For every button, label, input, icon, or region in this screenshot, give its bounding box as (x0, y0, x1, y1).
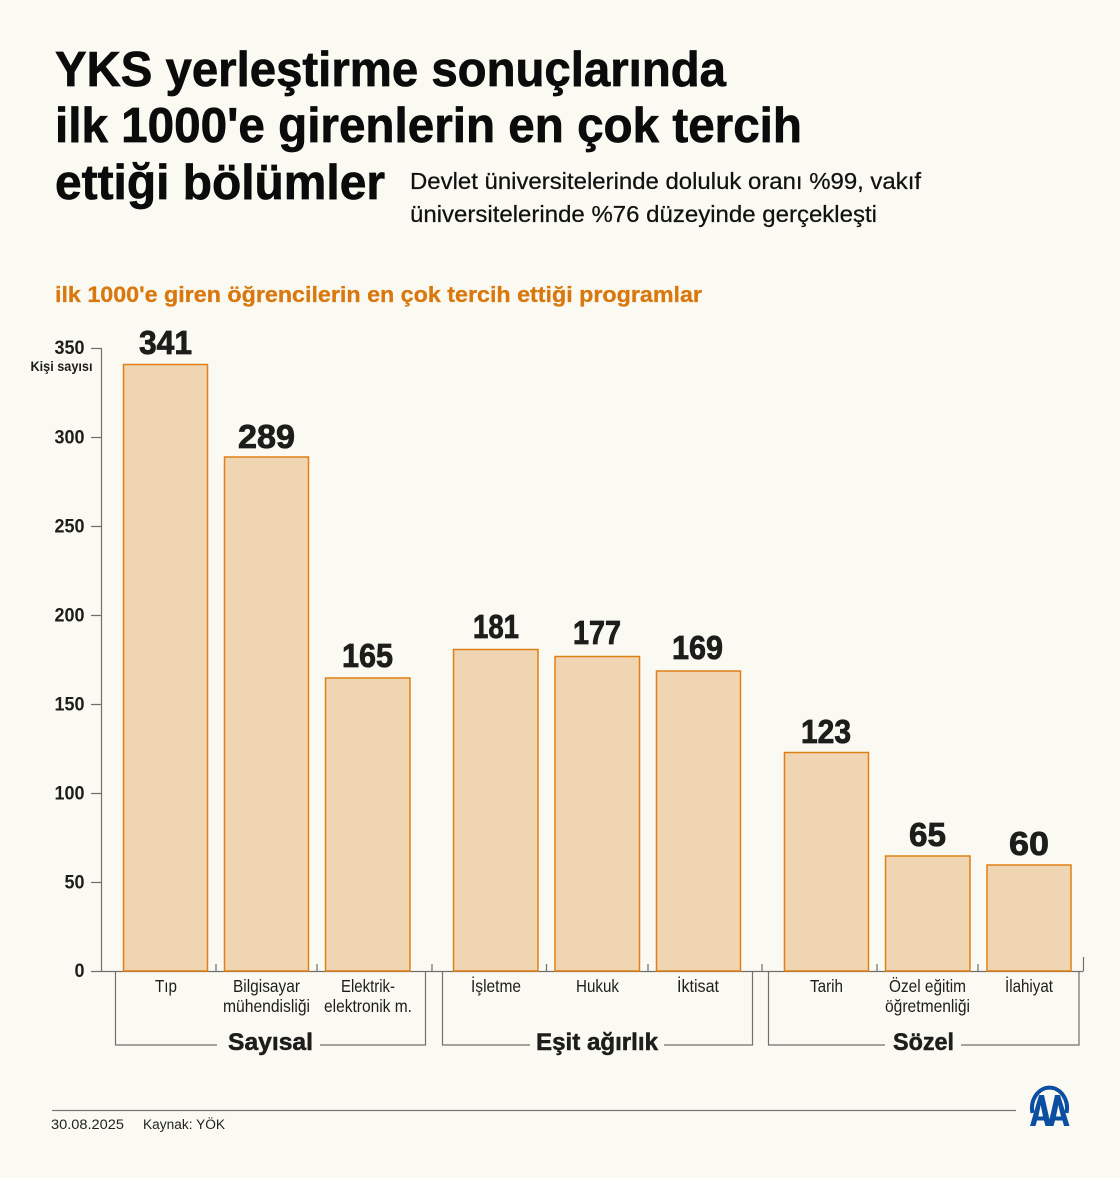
y axis: 150 (54, 694, 85, 716)
icon: AA logo (1030, 1088, 1070, 1126)
date: 30.08.2025 (51, 1117, 124, 1132)
bar: Tıp 341: Tıp (155, 976, 177, 996)
bar: İlahiyat 60 (987, 825, 1071, 996)
bar: Elektrik-elektronik m. 165: elektronik m. (324, 996, 412, 1016)
y axis: 350 (54, 337, 85, 359)
bar: Hukuk 177 (555, 614, 640, 996)
source: Kaynak: YÖK (143, 1117, 225, 1132)
bar: Elektrik-elektronik m. 165 (324, 637, 412, 1016)
bar: Özel eğitim öğretmenliği 65: öğretmenliği (885, 996, 970, 1016)
chart heading: ilk 1000'e giren öğrencilerin en çok tercih ettiği programlar (55, 282, 702, 307)
group: Sözel: Sözel (893, 1029, 954, 1056)
bar: İlahiyat 60: 60 (1009, 825, 1049, 862)
group: Sayısal: Sayısal (228, 1029, 313, 1056)
bar: İktisat 169 (656, 629, 740, 996)
bar: Tarih 123 (784, 713, 868, 996)
title: YKS yerleştirme sonuçlarında (55, 43, 727, 97)
bar: İşletme 181 (454, 608, 538, 996)
group: Eşit ağırlık: Eşit ağırlık (536, 1029, 659, 1056)
group: Sözel (768, 971, 1079, 1056)
bar: Özel eğitim öğretmenliği 65: 65 (909, 816, 946, 853)
bar: Elektrik-elektronik m. 165: Elektrik- (341, 976, 395, 996)
bar: Bilgisayar mühendisliği 289 (223, 418, 310, 1016)
bar: Bilgisayar mühendisliği 289: mühendisliği (223, 996, 310, 1016)
title: ettiği bölümler (55, 156, 385, 210)
subtitle: üniversitelerinde %76 düzeyinde gerçekleşti (410, 201, 877, 227)
title: ilk 1000'e girenlerin en çok tercih (55, 99, 802, 153)
bar: Özel eğitim öğretmenliği 65 (885, 816, 970, 1016)
bar: Hukuk 177: Hukuk (576, 976, 619, 996)
bar: İşletme 181: İşletme (471, 976, 521, 996)
y axis: 300 (54, 426, 85, 448)
y axis: 250 (54, 516, 85, 538)
group: Sayısal (116, 971, 426, 1056)
subtitle (410, 168, 922, 227)
bar chart (30, 324, 1084, 1056)
bar: Tıp 341 (124, 324, 208, 996)
y axis: 0 (74, 960, 85, 982)
y axis (54, 337, 1084, 982)
bar: Hukuk 177: 177 (573, 614, 621, 651)
y axis: 100 (54, 782, 85, 804)
bar: Elektrik-elektronik m. 165: 165 (342, 637, 393, 674)
bar: İktisat 169: İktisat (677, 976, 719, 996)
bar: Bilgisayar mühendisliği 289: Bilgisayar (233, 976, 300, 996)
footer rule (52, 1110, 1016, 1112)
bar: İktisat 169: 169 (672, 629, 723, 666)
bar: İlahiyat 60: İlahiyat (1005, 976, 1053, 996)
bar: Bilgisayar mühendisliği 289: 289 (238, 418, 295, 455)
y axis: 50 (64, 872, 85, 894)
bar: Tarih 123: Tarih (810, 976, 843, 996)
subtitle: Devlet üniversitelerinde doluluk oranı %99, vakıf (410, 168, 922, 194)
bar: Tarih 123: 123 (801, 713, 851, 750)
bar: İşletme 181: 181 (473, 608, 519, 645)
y axis: 200 (54, 604, 85, 626)
title (55, 43, 802, 210)
bar: Özel eğitim öğretmenliği 65: Özel eğitim (889, 976, 966, 996)
group: Eşit ağırlık (442, 971, 752, 1056)
bar: Tıp 341: 341 (139, 324, 192, 361)
axis unit label: Kişi sayısı (30, 358, 92, 374)
